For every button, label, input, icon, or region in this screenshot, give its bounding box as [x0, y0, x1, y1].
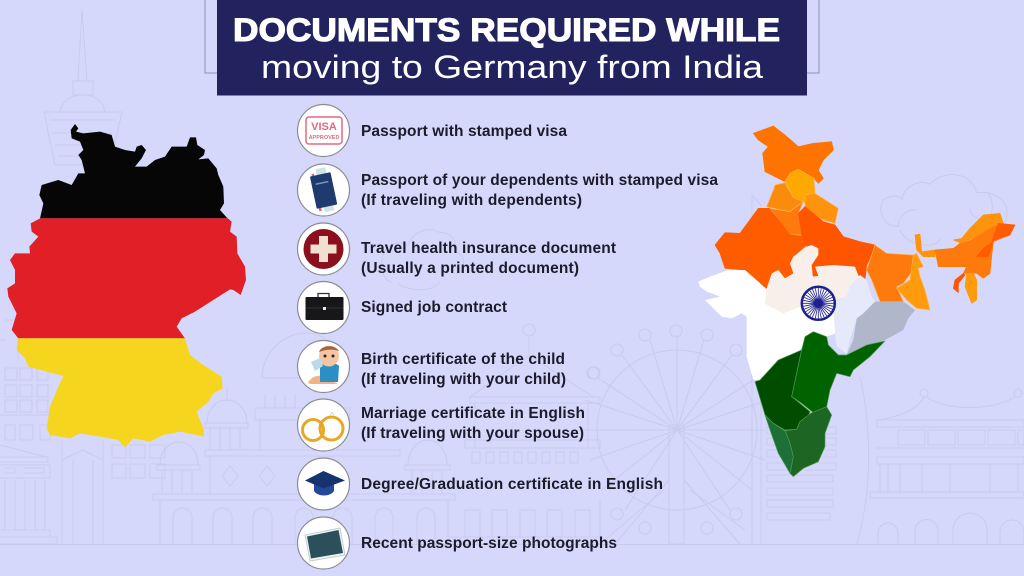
- title banner: [205, 0, 819, 96]
- item: degree certificate: [298, 458, 663, 510]
- label: Degree/Graduation certificate in English: [361, 476, 663, 493]
- label: Travel health insurance document: [361, 240, 616, 257]
- pagoda: [870, 389, 1024, 544]
- ground line: [0, 544, 1024, 546]
- label: Marriage certificate in English: [361, 405, 585, 422]
- Ashoka chakra: [802, 287, 835, 320]
- icon: baby: [298, 340, 350, 392]
- icon: visa approved stamp: VISA: [311, 121, 337, 133]
- title line one: DOCUMENTS REQUIRED WHILE: [233, 12, 780, 48]
- sub label: (If traveling with dependents): [361, 192, 582, 209]
- banner outline frame: [205, 0, 819, 73]
- title line two: moving to Germany from India: [261, 49, 763, 85]
- map of Germany in flag colours: [7, 124, 246, 448]
- label: Birth certificate of the child: [361, 351, 565, 368]
- map of India in flag colours: [698, 126, 1015, 477]
- document list: [298, 104, 718, 569]
- sub label: (If traveling with your child): [361, 371, 566, 388]
- curved tower: [752, 195, 869, 544]
- label: Passport with stamped visa: [361, 123, 567, 140]
- icon: visa approved stamp: APPROVED: [309, 135, 339, 141]
- item: marriage certificate: [298, 399, 585, 451]
- domed palace: [153, 333, 455, 544]
- item: passport photographs: [298, 517, 617, 569]
- item: dependents passport: [298, 164, 718, 216]
- sub label: (Usually a printed document): [361, 260, 579, 277]
- icon: graduation cap: [298, 458, 350, 510]
- clouds: [382, 175, 1007, 290]
- icon: visa approved stamp: [298, 104, 350, 156]
- north-eastern states: [915, 213, 1015, 303]
- central states: [698, 245, 915, 380]
- gate tower: [62, 440, 165, 544]
- sub label: (If traveling with your spouse): [361, 425, 584, 442]
- temple behind the list: [448, 324, 600, 537]
- item: health insurance: [298, 223, 616, 277]
- ferris wheel: [580, 325, 769, 544]
- northern states: [715, 126, 930, 310]
- TV tower: [44, 10, 122, 165]
- icon: blue passport: [298, 164, 350, 216]
- label: Signed job contract: [361, 299, 507, 316]
- icon: gold rings: [298, 399, 350, 451]
- item: signed job contract: [298, 282, 507, 334]
- icon: briefcase: [298, 282, 350, 334]
- southern states: [755, 332, 885, 477]
- banner fill: [217, 0, 807, 96]
- left office block: [0, 320, 60, 544]
- item: passport with stamped visa: [298, 104, 567, 156]
- icon: medical cross: [298, 223, 350, 275]
- label: Recent passport-size photographs: [361, 535, 617, 552]
- icon: photograph: [298, 517, 350, 569]
- item: birth certificate: [298, 340, 566, 392]
- label: Passport of your dependents with stamped visa: [361, 172, 718, 189]
